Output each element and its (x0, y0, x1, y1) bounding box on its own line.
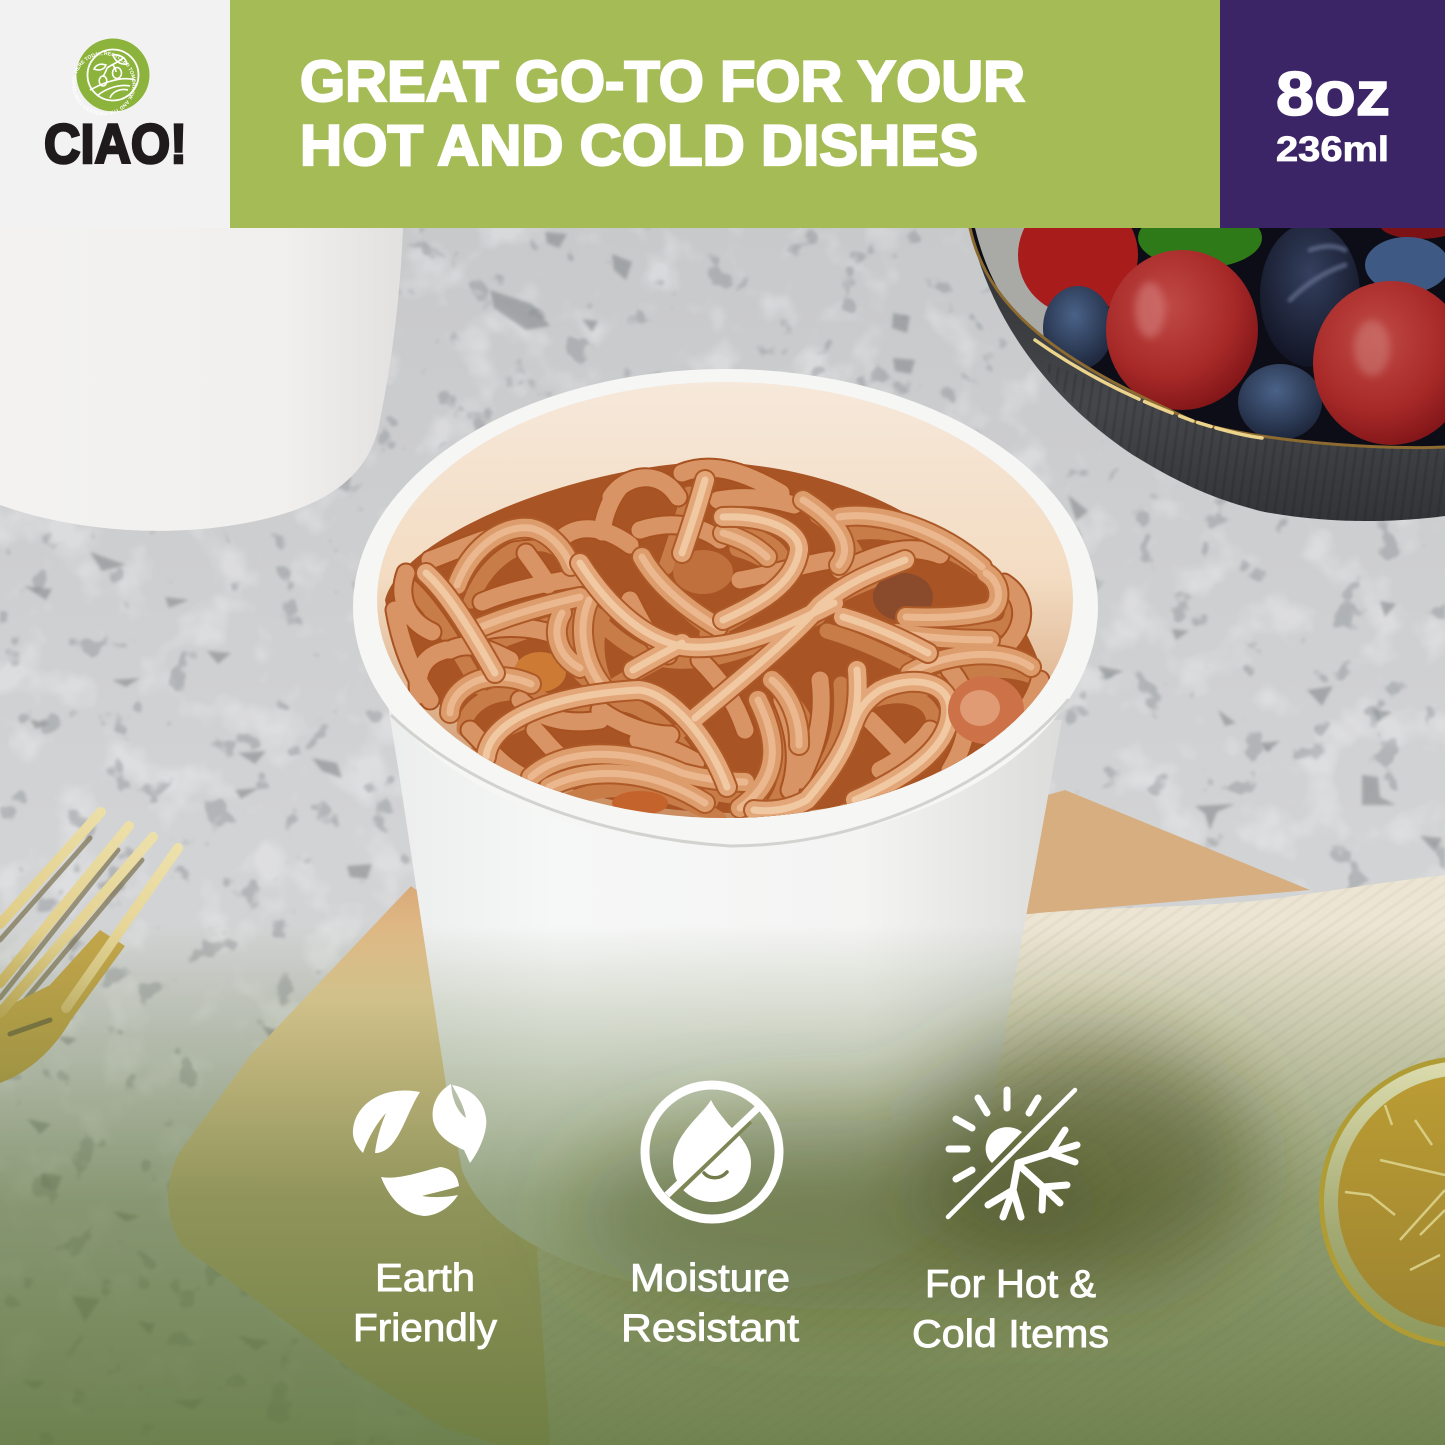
bowl interior (970, 228, 1445, 448)
logo wordmark: CIAO! (44, 112, 187, 175)
green fade overlay (0, 925, 1445, 1445)
meat chunks (514, 550, 933, 815)
header bar (0, 0, 1445, 228)
wooden board back corner (1020, 790, 1310, 915)
size in millilitres: 236ml (1276, 130, 1389, 169)
icon: crossed water drop (645, 1085, 779, 1219)
spaghetti (385, 462, 1045, 825)
gold rim (970, 228, 1445, 448)
logo panel (0, 0, 230, 228)
label: Earth (375, 1257, 475, 1300)
dark cup shadow (570, 1040, 1260, 1310)
logo badge (72, 38, 150, 116)
white cup in background (0, 228, 403, 531)
feature: earth friendly (353, 1084, 498, 1350)
bowl of berries and tomatoes (970, 195, 1445, 521)
label: Resistant (621, 1307, 799, 1350)
main paper cup (353, 369, 1098, 1292)
label: Cold Items (912, 1313, 1109, 1356)
label: For Hot & (925, 1263, 1096, 1306)
headline panel (230, 0, 1220, 228)
icon: three leaves (353, 1084, 486, 1216)
label: Moisture (630, 1257, 790, 1300)
tomato sauce chunk (948, 676, 1024, 744)
size panel (1220, 0, 1445, 228)
gold fork (0, 812, 178, 1083)
icon: sun and snowflake (948, 1090, 1077, 1217)
label: Friendly (353, 1307, 498, 1350)
feature: for hot and cold items (912, 1090, 1109, 1356)
headline: GREAT GO-TO FOR YOUR (300, 50, 1025, 114)
size in ounces: 8oz (1276, 60, 1390, 129)
napkin (537, 875, 1445, 1445)
bowl body (978, 257, 1445, 521)
feature: moisture resistant (621, 1085, 801, 1350)
cup body (388, 705, 1062, 1292)
logo badge: AND THE PROCESS CONTINUES. HERE TODAY, RECYCLED TOMORROW. (72, 52, 136, 116)
wooden board front (168, 886, 552, 1445)
lemon slice (1319, 1056, 1445, 1348)
cup rim (353, 369, 1098, 845)
headline: HOT AND COLD DISHES (300, 114, 978, 178)
cup interior (377, 382, 1073, 818)
